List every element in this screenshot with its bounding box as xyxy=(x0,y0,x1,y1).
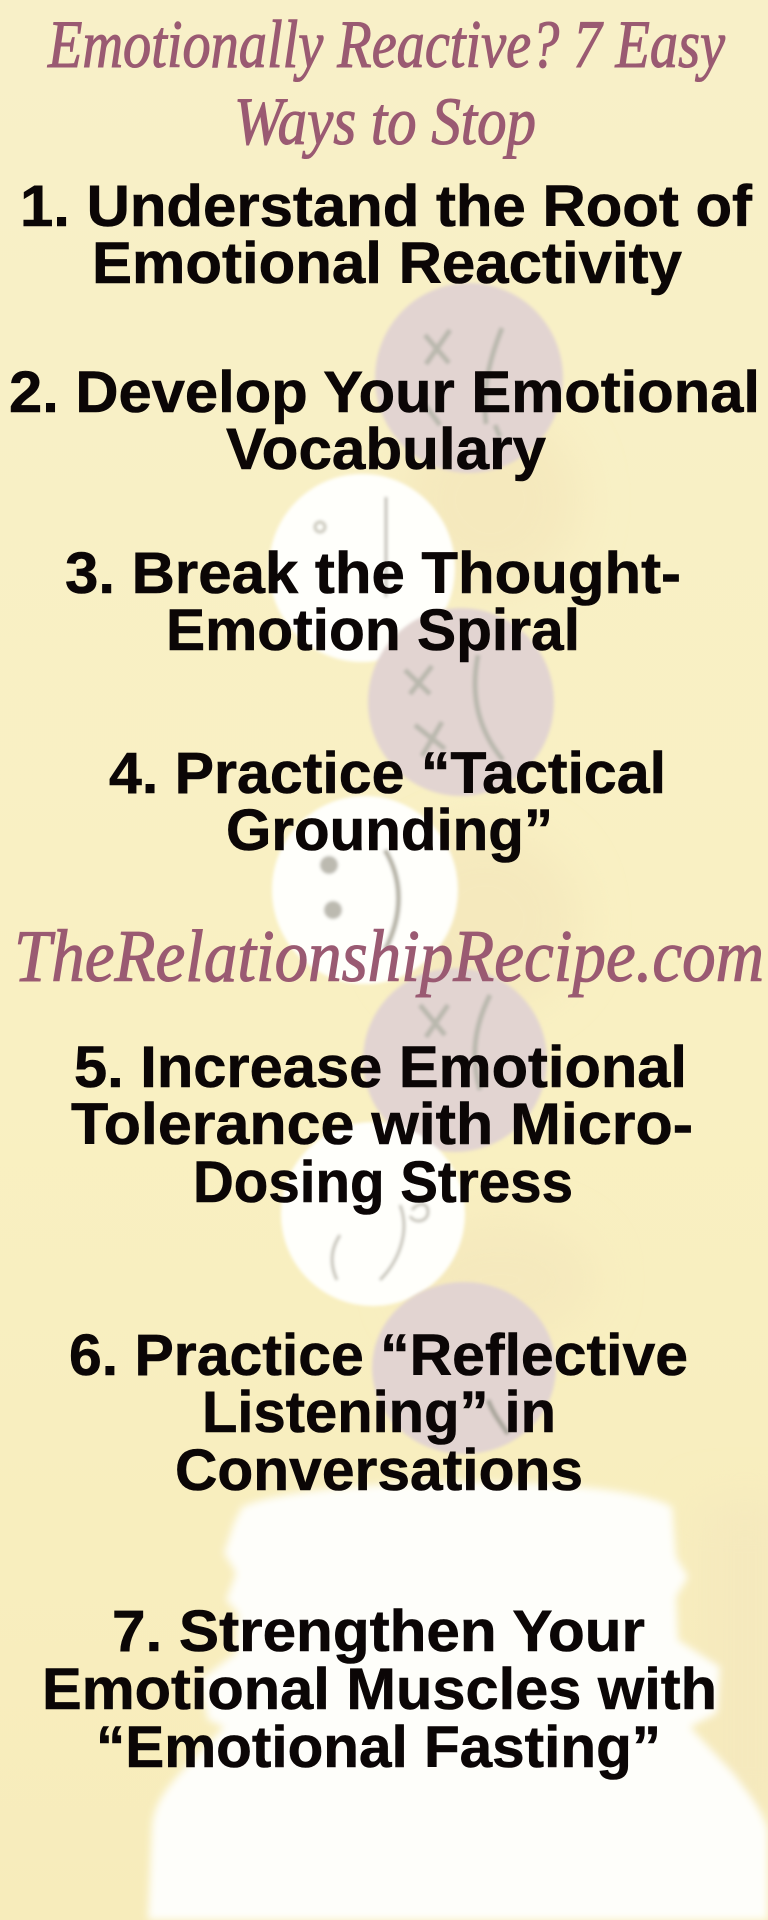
tip 5: Dosing Stress xyxy=(193,1150,573,1215)
tip 7: “Emotional Fasting” xyxy=(96,1715,661,1780)
tip 6: Conversations xyxy=(175,1438,583,1503)
tip 1: 1. Understand the Root of xyxy=(20,174,753,239)
pill 5 mauve xyxy=(363,968,547,1152)
pill 6 white xyxy=(281,1122,465,1306)
tip 1 xyxy=(20,174,753,296)
tip 3: 3. Break the Thought- xyxy=(65,541,681,606)
bottle xyxy=(148,1482,768,1920)
pill 1 mauve xyxy=(375,283,563,473)
tip 2: Vocabulary xyxy=(226,417,546,482)
tip 1: Emotional Reactivity xyxy=(92,231,682,296)
background photo: pills falling into bottle xyxy=(148,283,768,1920)
pill 2 white xyxy=(269,474,455,662)
tip 7: 7. Strengthen Your xyxy=(112,1599,645,1664)
title xyxy=(47,6,726,159)
tip 2: 2. Develop Your Emotional xyxy=(9,360,760,425)
tip 5: Tolerance with Micro- xyxy=(71,1092,693,1157)
tip 3: Emotion Spiral xyxy=(166,598,580,663)
pill 3 mauve xyxy=(368,608,554,796)
tip 6: Listening” in xyxy=(202,1380,556,1445)
pill 7 mauve xyxy=(372,1282,556,1454)
soft shadows xyxy=(390,410,768,1820)
tip 4 xyxy=(109,741,666,863)
title: Ways to Stop xyxy=(234,83,536,159)
tip 2 xyxy=(9,360,760,482)
tip 6: 6. Practice “Reflective xyxy=(69,1323,688,1388)
tip 4: Grounding” xyxy=(226,798,553,863)
tip 7 xyxy=(42,1599,717,1780)
tip 4: 4. Practice “Tactical xyxy=(109,741,666,806)
tip 7: Emotional Muscles with xyxy=(42,1657,717,1722)
tip 3 xyxy=(65,541,681,663)
tip 6 xyxy=(69,1323,688,1503)
tip 5: 5. Increase Emotional xyxy=(74,1035,687,1100)
pill 4 white xyxy=(272,796,458,984)
tip 5 xyxy=(71,1035,693,1215)
